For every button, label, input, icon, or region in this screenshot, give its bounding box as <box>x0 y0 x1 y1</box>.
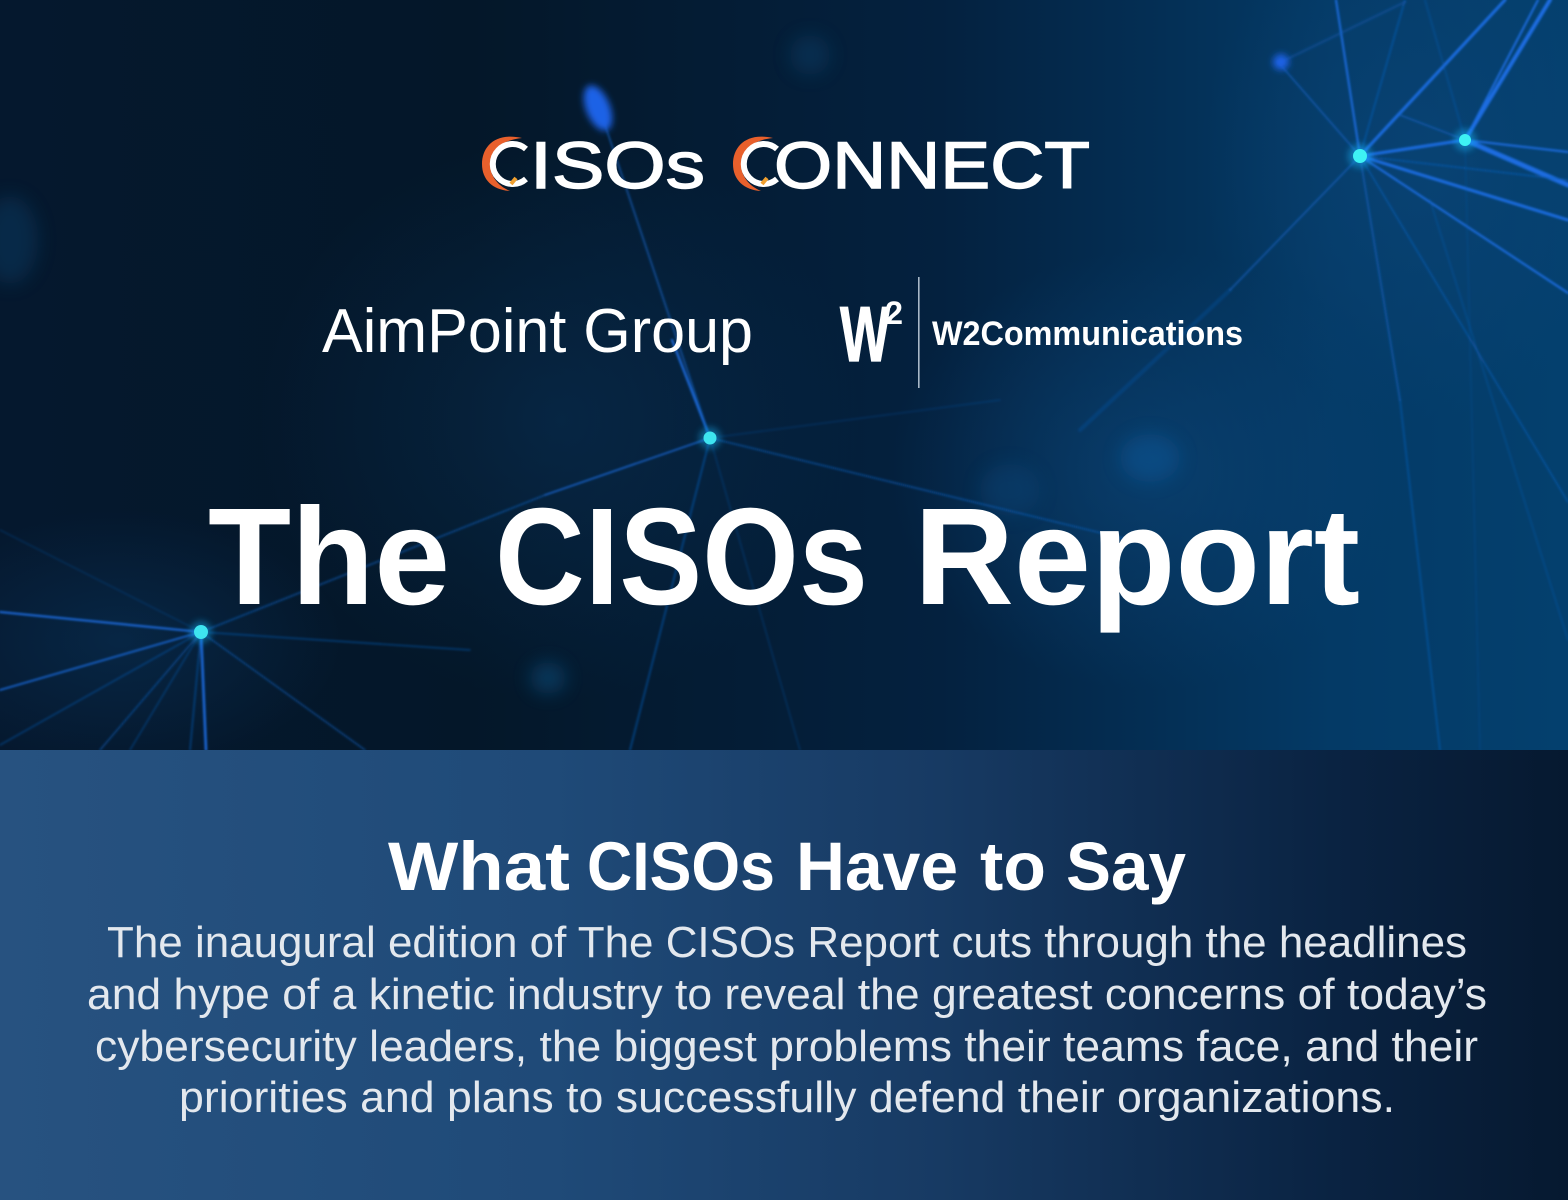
text block: description <box>87 918 1487 1122</box>
title: The <box>208 480 450 634</box>
logo text: ONNECT: ONNECT <box>774 128 1090 202</box>
title: Report <box>914 480 1360 634</box>
icon: Connect C mark <box>733 137 777 191</box>
network nodes <box>190 54 1476 643</box>
logo text: W2Communications: W2Communications <box>932 315 1243 353</box>
heading: to <box>980 828 1046 905</box>
logo text: ISOs: ISOs <box>530 128 705 202</box>
icon: W2 mark: W <box>840 290 890 378</box>
heading: Have <box>796 828 958 905</box>
icon: CISOs C mark <box>482 137 526 191</box>
logo: CISOs Connect <box>482 128 1090 202</box>
logo: W2 Communications <box>840 277 1243 388</box>
panel: what CISOs have to say <box>0 750 1568 1200</box>
title: CISOs <box>495 480 868 634</box>
logo: AimPoint Group: AimPoint Group <box>322 297 753 366</box>
text block: description: priorities and plans to successfully defend their organizations. <box>179 1073 1395 1122</box>
text block: description: and hype of a kinetic industry to reveal the greatest concerns of today’s <box>87 970 1487 1019</box>
text block: description: cybersecurity leaders, the biggest problems their teams face, and their <box>95 1022 1478 1071</box>
title <box>208 480 1360 634</box>
icon: W2 mark: 2 <box>885 295 903 331</box>
heading: Say <box>1066 828 1186 905</box>
heading: What <box>388 828 570 905</box>
divider <box>918 277 920 388</box>
heading <box>388 828 1186 905</box>
panel: hero network background <box>0 0 1568 770</box>
heading: CISOs <box>587 828 775 905</box>
network lines <box>0 0 1568 750</box>
text block: description: The inaugural edition of The CISOs Report cuts through the headlines <box>107 918 1467 967</box>
